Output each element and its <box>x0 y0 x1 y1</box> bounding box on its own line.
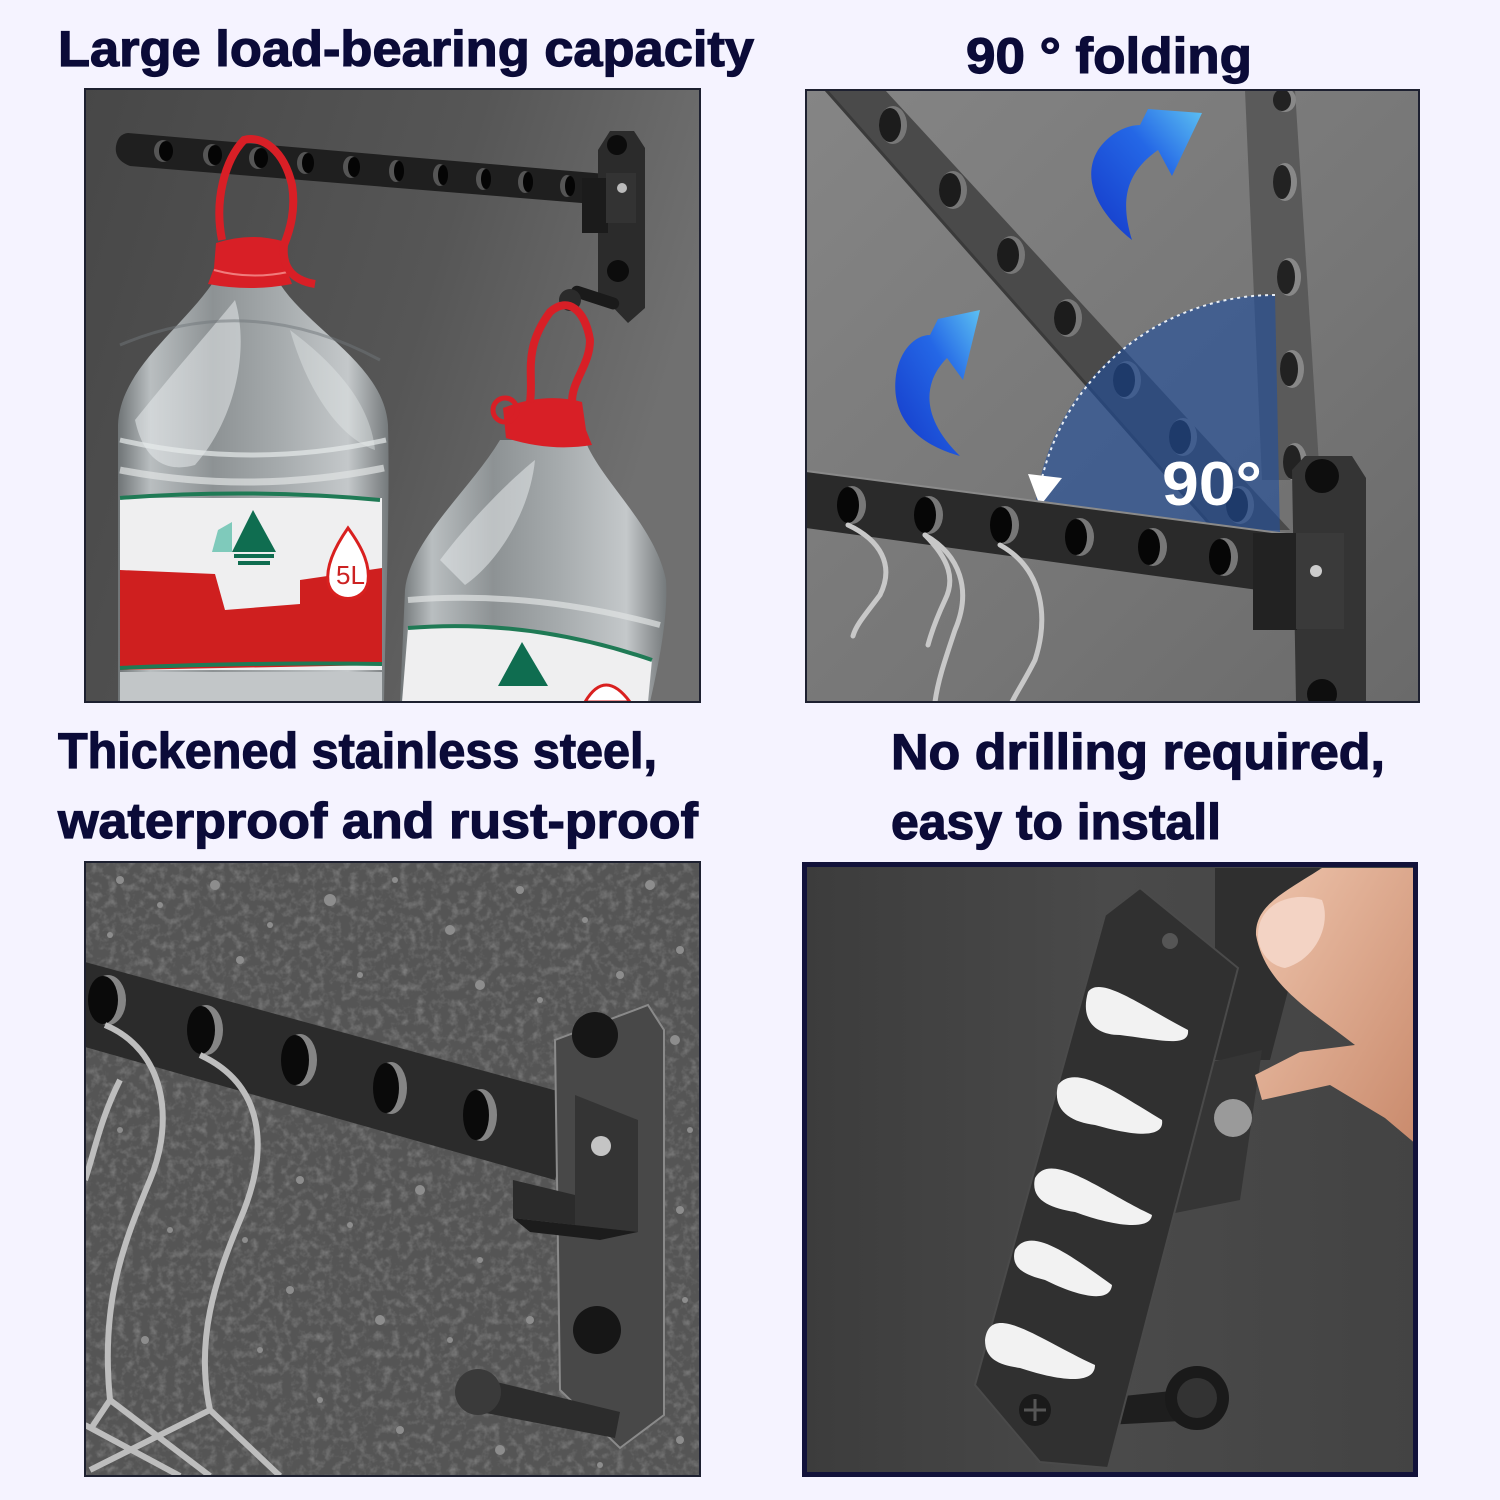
panel: waterproof photo <box>85 862 700 1476</box>
horizontal arm <box>806 471 1287 594</box>
panel border <box>85 862 700 1476</box>
adhesive strips <box>985 987 1188 1379</box>
pin and foot <box>1120 1366 1229 1430</box>
heading: waterproof and rust-proof: waterproof and rust-proof <box>57 793 698 849</box>
hand <box>1255 868 1417 1145</box>
hangers <box>85 1025 280 1476</box>
lower blue arrow <box>895 310 980 456</box>
panel border <box>806 90 1419 702</box>
rack arm <box>116 133 606 205</box>
red handle <box>219 139 315 284</box>
wall bracket <box>1253 456 1366 709</box>
dotted arc <box>1042 295 1275 478</box>
wall bracket <box>455 1005 664 1448</box>
90 degree label: 90° <box>1162 450 1262 519</box>
mounting plate <box>975 888 1238 1468</box>
heading: 90 degree folding: 90 ° folding <box>966 28 1252 84</box>
heading: easy to install: easy to install <box>891 794 1221 850</box>
panel: adhesive install photo <box>803 863 1417 1476</box>
large water bottle: 5L <box>336 560 365 590</box>
bottle cap <box>208 237 292 288</box>
diagonal arm <box>826 90 1290 530</box>
white arrowhead <box>1028 474 1062 502</box>
hinge block <box>1176 1060 1260 1213</box>
water droplet texture <box>85 862 700 1476</box>
heading: thickened stainless steel: Thickened stainless steel, <box>58 723 657 779</box>
screws <box>1019 933 1252 1426</box>
vertical arm <box>1245 88 1320 481</box>
folded arm <box>1215 868 1320 1060</box>
small water bottle <box>400 305 666 702</box>
panel border <box>85 89 700 702</box>
heading: large load-bearing capacity: Large load-bearing capacity <box>58 21 754 77</box>
panel: load-bearing photo <box>85 89 700 702</box>
scattered droplets <box>107 876 693 1468</box>
blue angle wedge <box>1036 295 1280 535</box>
wall bracket <box>559 131 645 323</box>
rack arm <box>85 962 572 1180</box>
panel border <box>804 864 1416 1474</box>
large water bottle <box>118 139 389 702</box>
panel: 90 degree folding photo <box>806 88 1419 709</box>
heading: no drilling required: No drilling required, <box>891 724 1385 780</box>
red handle <box>530 305 590 402</box>
steel hooks <box>848 525 1042 702</box>
upper blue arrow <box>1091 109 1202 240</box>
